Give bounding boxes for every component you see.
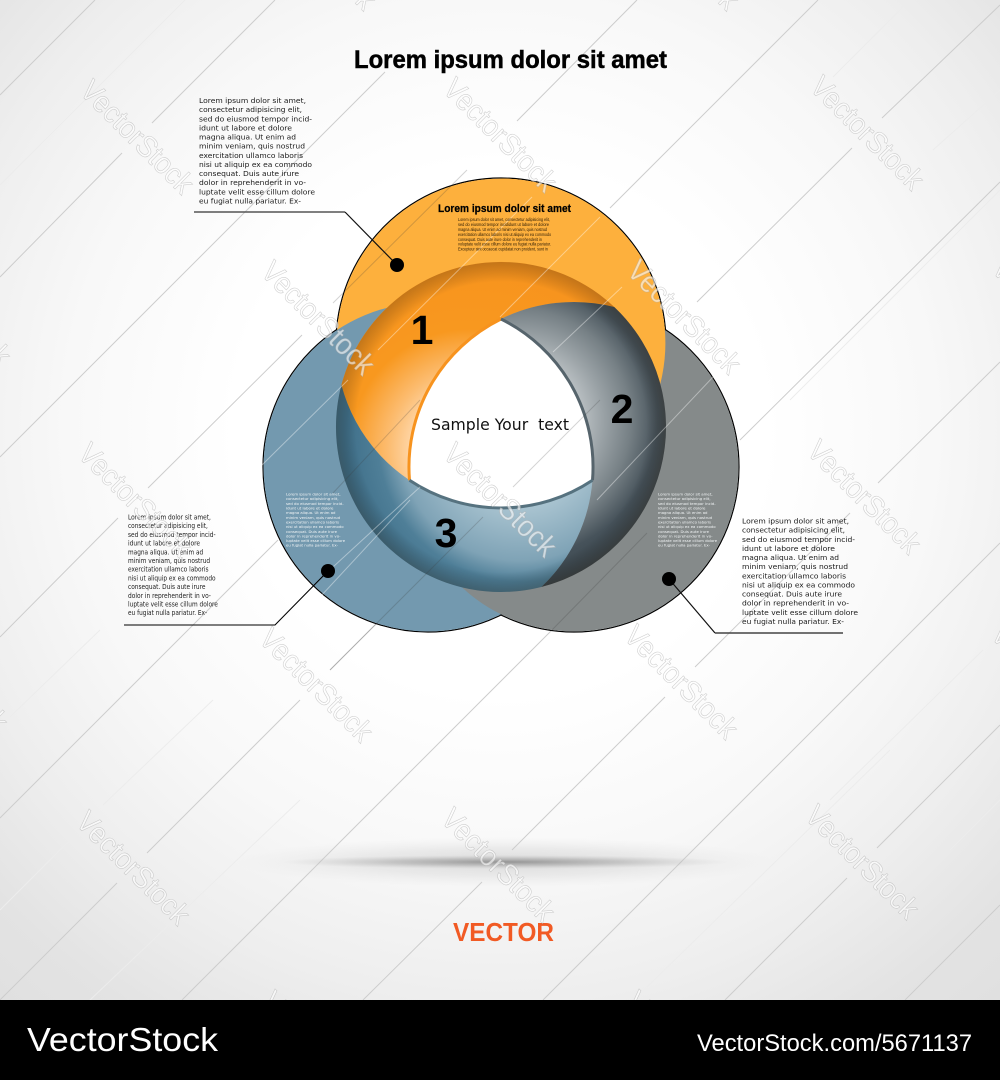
three overlapping circles (263, 178, 739, 632)
callout text: top left: nisi ut aliquip ex ea commodo (199, 160, 312, 169)
callout text: top left: sed do eiusmod tempor incid- (199, 114, 312, 123)
grey panel text: sed do eiusmod tempor incid- (658, 502, 716, 506)
callout text: top left: dolor in reprehenderit in vo- (199, 178, 306, 187)
orange panel text: magna aliqua. Ut enim ad minim veniam, quis nostrud (458, 227, 547, 232)
orange panel heading: Lorem ipsum dolor sit amet (438, 203, 571, 215)
ring segment 3: blue (336, 385, 592, 592)
callout text: top left: Lorem ipsum dolor sit amet, (199, 96, 306, 105)
orange panel text: voluptate velit esse cillum dolore eu fugiat nulla pariatur. (458, 242, 551, 247)
grey panel text: consectetur adipisicing elit, (658, 497, 711, 501)
orange panel text: consequat. Duis aute irure dolor in reprehenderit in (458, 237, 542, 242)
blue panel text: idunt ut labore et dolore (286, 506, 334, 510)
blue panel text: consequat. Duis aute irure (286, 530, 338, 534)
footer url: VectorStock.com/5671137 (697, 1030, 972, 1057)
drop shadow under diagram (235, 837, 775, 887)
callout text: right: idunt ut labore et dolore (742, 544, 835, 553)
callout text: left: minim veniam, quis nostrud (128, 556, 210, 565)
ring outer rim shading (336, 262, 666, 592)
callout text: left: sed do eiusmod tempor incid- (128, 530, 216, 539)
callout text: left: magna aliqua. Ut enim ad (128, 548, 203, 556)
central hole (409, 319, 593, 508)
callout text: left: consectetur adipisicing elit, (128, 522, 208, 530)
callout text: top left: minim veniam, quis nostrud (199, 142, 305, 151)
blue panel text: minim veniam, quis nostrud (286, 516, 341, 520)
grey panel text: dolor in reprehenderit in vo- (658, 534, 713, 538)
watermarks: VectorStock (617, 619, 745, 746)
number 2: 2 (611, 386, 633, 432)
orange panel text: exercitation ullamco laboris nisi ut aliquip ex ea commodo (458, 232, 551, 237)
callout text: right: magna aliqua. Ut enim ad (742, 553, 839, 562)
callout text: right: consectetur adipisicing elit, (742, 526, 845, 535)
grey panel text: consequat. Duis aute irure (658, 530, 710, 534)
callout text: left: consequat. Duis aute irure (128, 583, 206, 591)
callout text: left: idunt ut labore et dolore (128, 539, 200, 548)
grey panel text: minim veniam, quis nostrud (658, 516, 713, 520)
callout text: top left (199, 96, 315, 205)
callout text: right: sed do eiusmod tempor incid- (742, 535, 855, 544)
hole edge: grey (501, 319, 593, 480)
callout text: left: Lorem ipsum dolor sit amet, (128, 513, 211, 522)
number 3: 3 (435, 510, 457, 556)
blue panel text: sed do eiusmod tempor incid- (286, 502, 344, 506)
circle: grey (410, 303, 738, 631)
callout text: right (742, 516, 858, 626)
watermarks: VectorStock (803, 70, 931, 197)
callout text: top left: eu fugiat nulla pariatur. Ex- (199, 196, 301, 205)
callout text: top left: luptate velit esse cillum dolore (199, 187, 315, 196)
blue panel text: exercitation ullamco laboris (286, 520, 339, 524)
grey panel text: Lorem ipsum dolor sit amet, (658, 493, 713, 497)
callout text: left (128, 513, 218, 617)
blue panel text: consectetur adipisicing elit, (286, 497, 339, 501)
orange panel text (458, 217, 551, 252)
ring segment 2: grey (501, 302, 666, 587)
circle: orange overlap on grey (501, 178, 666, 384)
title: Lorem ipsum dolor sit amet (354, 46, 668, 74)
callout text: right: dolor in reprehenderit in vo- (742, 599, 849, 608)
footer brand: VectorStock (27, 1021, 219, 1058)
grey panel text: nisi ut aliquip ex ea commodo (658, 525, 716, 529)
callout text: right: consequat. Duis aute irure (742, 590, 842, 599)
callout text: top left: consectetur adipisicing elit, (199, 105, 302, 114)
blue panel text: dolor in reprehenderit in vo- (286, 534, 341, 538)
watermarks: VectorStock (798, 799, 926, 926)
callout leader: right (662, 572, 843, 633)
callout text: top left: consequat. Duis aute irure (199, 169, 299, 178)
callout text: right: eu fugiat nulla pariatur. Ex- (742, 617, 844, 626)
watermarks: VectorStock (436, 437, 564, 564)
watermarks: VectorStock (69, 805, 197, 932)
watermarks: VectorStock (436, 72, 564, 199)
grey panel text: exercitation ullamco laboris (658, 520, 711, 524)
callout text: left: dolor in reprehenderit in vo- (128, 591, 211, 600)
orange panel text: sed do eiusmod tempor incididunt ut labore et dolore (458, 222, 549, 227)
orange panel text: Excepteur sint occaecat cupidatat non proident, sunt in (458, 246, 548, 252)
grey panel text (658, 492, 718, 548)
callout text: right: nisi ut aliquip ex ea commodo (742, 580, 855, 589)
ring segment 1: orange (341, 262, 614, 480)
callout text: left: eu fugiat nulla pariatur. Ex- (128, 609, 207, 617)
callout text: top left: magna aliqua. Ut enim ad (199, 133, 296, 142)
watermarks: VectorStock (620, 254, 748, 381)
hole edge: blue (410, 480, 592, 508)
callout text: left: nisi ut aliquip ex ea commodo (128, 574, 216, 583)
callout text: top left: idunt ut labore et dolore (199, 123, 292, 132)
callout leader: left (124, 564, 335, 625)
blue panel text: Lorem ipsum dolor sit amet, (286, 493, 341, 497)
hole edge: orange (409, 319, 501, 480)
blue panel text: nisi ut aliquip ex ea commodo (286, 525, 344, 529)
footer bar (0, 1000, 1000, 1080)
watermarks: VectorStock (252, 622, 380, 749)
callout text: left: exercitation ullamco laboris (128, 565, 209, 574)
callout text: left: luptate velit esse cillum dolore (128, 600, 218, 609)
grey panel text: luptate velit esse cillum dolore (658, 539, 718, 543)
watermarks: VectorStock (73, 74, 201, 201)
callout text: right: minim veniam, quis nostrud (742, 562, 848, 571)
callout text: right: Lorem ipsum dolor sit amet, (742, 516, 849, 526)
grey panel text: eu fugiat nulla pariatur. Ex- (658, 544, 711, 548)
callout text: top left: exercitation ullamco laboris (199, 151, 303, 160)
grey panel text: magna aliqua. Ut enim ad (658, 511, 708, 515)
vector label: VECTOR (453, 917, 554, 947)
watermarks: VectorStock (254, 255, 382, 382)
grey panel text: idunt ut labore et dolore (658, 506, 706, 510)
watermarks: VectorStock (800, 434, 928, 561)
callout text: right: luptate velit esse cillum dolore (742, 608, 858, 617)
blue panel text (286, 492, 346, 548)
number 1: 1 (411, 307, 433, 353)
watermarks: VectorStock (71, 437, 199, 564)
blue panel text: magna aliqua. Ut enim ad (286, 511, 336, 515)
blue panel text: eu fugiat nulla pariatur. Ex- (286, 544, 339, 548)
blue panel text: luptate velit esse cillum dolore (286, 539, 346, 543)
center label: Sample Your text (431, 415, 569, 434)
circle: blue (264, 303, 592, 631)
callout text: right: exercitation ullamco laboris (742, 571, 846, 580)
orange panel text: Lorem ipsum dolor sit amet, consectetur adipisicing elit, (458, 217, 550, 222)
callout leader: top (194, 212, 404, 272)
circle: orange (337, 179, 665, 507)
watermarks: VectorStock (434, 802, 562, 929)
